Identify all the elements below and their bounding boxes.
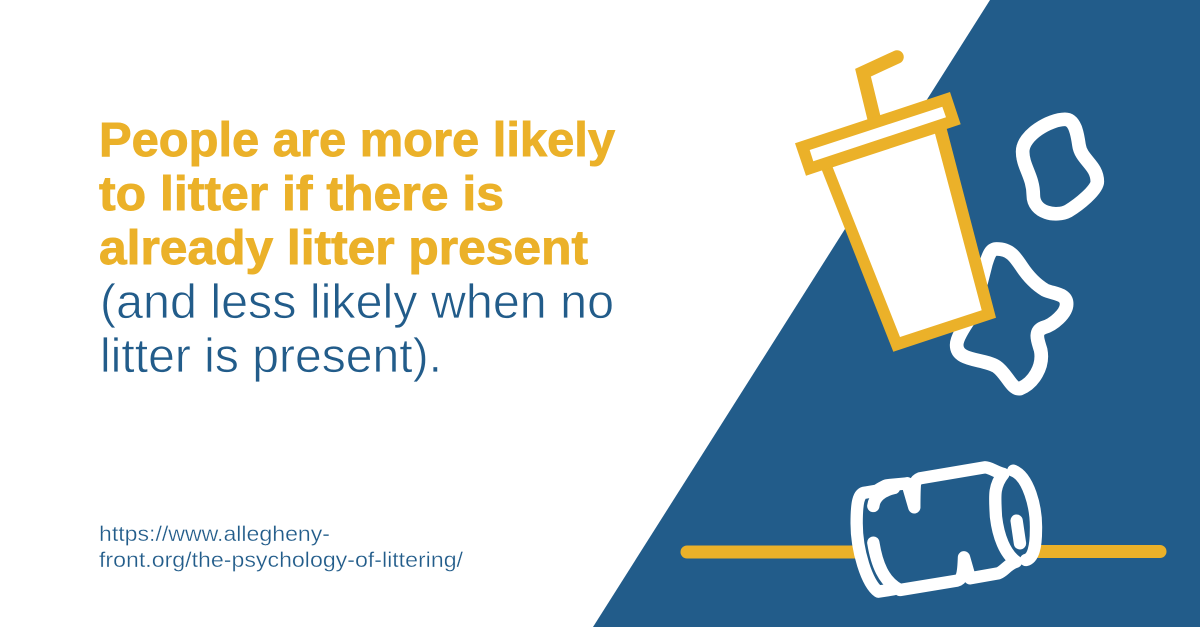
ground line right [1039, 545, 1160, 558]
secondary statement text: litter is present). [100, 330, 442, 383]
icon: crushed bottle on its side [857, 467, 1036, 592]
ground line left [687, 546, 860, 558]
cup straw [863, 57, 897, 118]
source URL [99, 523, 463, 572]
cup body interior [833, 134, 982, 337]
headline text: already litter present [99, 222, 588, 275]
cup lid [795, 92, 961, 176]
secondary statement text [100, 276, 614, 383]
headline text: to litter if there is [99, 168, 504, 221]
blue triangle background panel [593, 0, 1200, 627]
secondary statement text: (and less likely when no [100, 276, 614, 329]
headline text [99, 114, 615, 275]
cup body [821, 126, 996, 352]
icon: drink cup with straw [795, 57, 996, 352]
icon: litter blob lower [957, 249, 1067, 389]
source URL: https://www.allegheny- [99, 523, 330, 546]
source URL: front.org/the-psychology-of-littering/ [99, 549, 463, 572]
icon: litter blob upper [1023, 119, 1097, 214]
cup lid interior [810, 107, 946, 161]
headline text: People are more likely [99, 114, 615, 167]
